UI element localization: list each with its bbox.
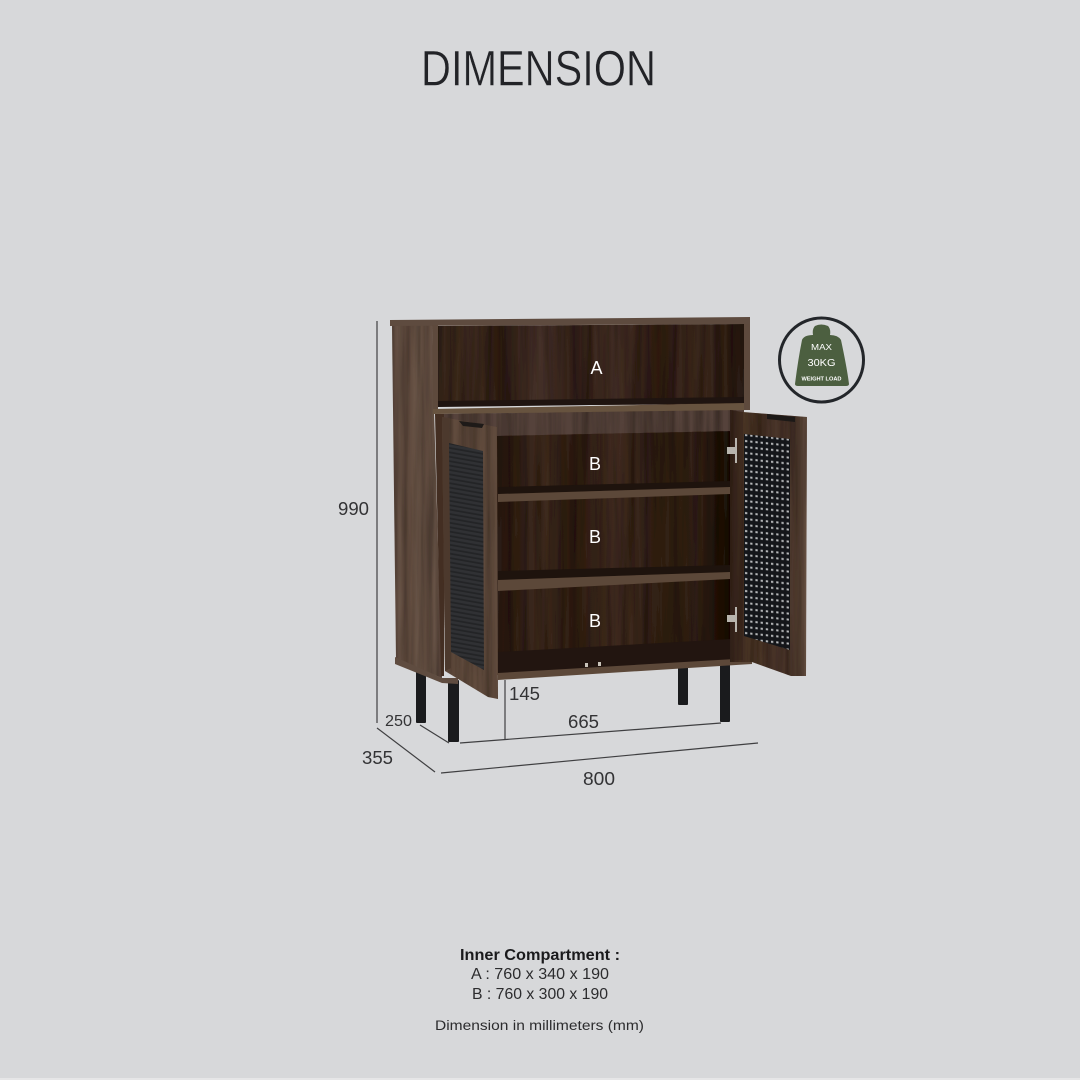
front uprights bbox=[432, 325, 438, 410]
badge: max weight load: MAX bbox=[811, 343, 833, 352]
mesh panel bbox=[744, 434, 790, 650]
compartment labels: B bbox=[589, 611, 601, 631]
inner compartment notes: Inner Compartment : bbox=[460, 947, 620, 964]
compartment labels: A bbox=[590, 358, 603, 378]
left door bbox=[442, 417, 498, 699]
upper hinge bbox=[727, 438, 737, 463]
dimension values: 145 bbox=[509, 684, 540, 704]
lower hinge bbox=[727, 607, 737, 632]
cabinet floor bbox=[498, 639, 748, 674]
door handle bbox=[767, 414, 795, 422]
door handle bbox=[459, 421, 484, 428]
dimension lines bbox=[377, 321, 758, 773]
dimension values: 800 bbox=[583, 769, 615, 789]
shelf 2 bbox=[498, 565, 730, 580]
shelf pins bbox=[585, 662, 601, 667]
compartment A back bbox=[438, 324, 744, 406]
title: DIMENSION bbox=[421, 40, 656, 96]
inner compartment notes: B : 760 x 300 x 190 bbox=[472, 986, 608, 1003]
middle rail bbox=[433, 403, 744, 414]
side bottom edge bbox=[395, 657, 458, 684]
dimension values bbox=[338, 499, 615, 789]
badge: max weight load: WEIGHT LOAD bbox=[802, 376, 842, 382]
inner compartment notes: Dimension in millimeters (mm) bbox=[435, 1018, 644, 1033]
front left leg bbox=[448, 680, 459, 742]
dimension values: 250 bbox=[385, 713, 412, 730]
shelf 1 bbox=[498, 481, 730, 494]
compartment labels bbox=[589, 358, 603, 631]
cabinet bbox=[390, 317, 807, 742]
inner compartment notes bbox=[435, 947, 644, 1033]
top board bbox=[390, 317, 750, 326]
back legs bbox=[416, 660, 730, 723]
compartment labels: B bbox=[589, 454, 601, 474]
louver panel bbox=[449, 443, 484, 670]
badge: max weight load bbox=[780, 318, 864, 402]
right door bbox=[727, 410, 807, 676]
compartment labels: B bbox=[589, 527, 601, 547]
compartment B back bbox=[497, 431, 732, 675]
icon: weight bbox=[795, 324, 849, 386]
dimension values: 355 bbox=[362, 748, 393, 768]
dimension values: 665 bbox=[568, 712, 599, 732]
left side panel bbox=[392, 325, 442, 678]
compartment A floor bbox=[438, 397, 744, 407]
badge: max weight load: 30KG bbox=[808, 357, 836, 369]
dimension values: 990 bbox=[338, 499, 369, 519]
upper door frame bbox=[436, 410, 744, 438]
inner compartment notes: A : 760 x 340 x 190 bbox=[471, 966, 609, 983]
